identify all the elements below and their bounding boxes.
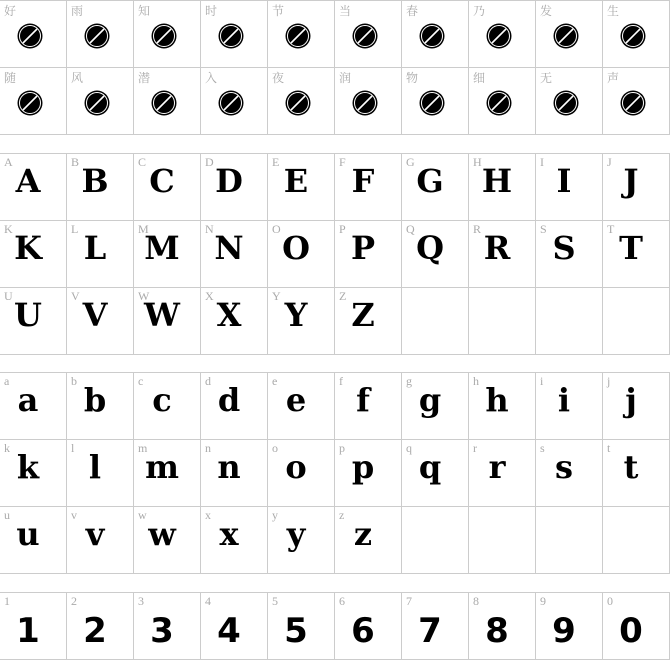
cell: 声: [603, 68, 670, 135]
n: [201, 440, 268, 507]
v: [67, 507, 134, 574]
cell: 发: [536, 1, 603, 68]
cell: 风: [67, 68, 134, 135]
v: v: [71, 508, 77, 522]
cell: 入: [201, 68, 268, 135]
c: c: [152, 381, 172, 419]
cell: 物: 物: [406, 71, 418, 85]
H: H: [473, 155, 482, 169]
z: [335, 507, 402, 574]
8: 8: [473, 594, 479, 608]
cell: 时: 时: [205, 4, 217, 18]
J: [603, 154, 670, 221]
empty: [402, 288, 469, 355]
b: [67, 373, 134, 440]
N: N: [214, 229, 244, 267]
s: s: [540, 441, 545, 455]
5: [268, 593, 335, 660]
cell: 节: [268, 1, 335, 68]
g: g: [419, 381, 441, 419]
empty: [469, 288, 536, 355]
cell: 潜: [134, 68, 201, 135]
x: [201, 507, 268, 574]
R: R: [484, 229, 510, 267]
F: F: [352, 162, 374, 200]
W: W: [138, 289, 149, 303]
M: [134, 221, 201, 288]
empty: [402, 507, 469, 574]
W: [134, 288, 201, 355]
k: k: [4, 441, 10, 455]
Q: Q: [406, 222, 415, 236]
Y: Y: [285, 296, 307, 334]
X: [201, 288, 268, 355]
n: n: [217, 448, 241, 486]
5: 5: [272, 594, 278, 608]
K: K: [14, 229, 42, 267]
cell: 润: 润: [339, 71, 351, 85]
w: w: [148, 515, 176, 553]
1: 1: [16, 611, 40, 651]
a: a: [4, 374, 9, 388]
0: [603, 593, 670, 660]
9: 9: [552, 611, 576, 651]
cell: 夜: [268, 68, 335, 135]
H: [469, 154, 536, 221]
a: [0, 373, 67, 440]
J: J: [623, 162, 639, 200]
section: lowercase: [0, 372, 670, 574]
z: z: [339, 508, 344, 522]
i: i: [558, 381, 570, 419]
Z: [335, 288, 402, 355]
B: [67, 154, 134, 221]
4: 4: [205, 594, 211, 608]
u: u: [16, 515, 40, 553]
g: [402, 373, 469, 440]
cell: 细: [469, 68, 536, 135]
o: [268, 440, 335, 507]
R: R: [473, 222, 481, 236]
cell: 声: 声: [607, 71, 619, 85]
c: [134, 373, 201, 440]
9: [536, 593, 603, 660]
g: g: [406, 374, 412, 388]
0: 0: [619, 611, 643, 651]
k: [0, 440, 67, 507]
cell: 春: 春: [406, 4, 418, 18]
2: 2: [71, 594, 77, 608]
X: X: [205, 289, 214, 303]
cell: 乃: [469, 1, 536, 68]
0: 0: [607, 594, 613, 608]
Q: Q: [416, 229, 444, 267]
d: d: [218, 381, 240, 419]
L: L: [71, 222, 78, 236]
x: x: [205, 508, 211, 522]
U: U: [4, 289, 13, 303]
U: U: [14, 296, 42, 334]
r: r: [473, 441, 477, 455]
c: c: [138, 374, 143, 388]
l: l: [71, 441, 74, 455]
h: h: [485, 381, 509, 419]
l: l: [89, 448, 101, 486]
e: [268, 373, 335, 440]
empty: [603, 507, 670, 574]
A: A: [4, 155, 13, 169]
y: [268, 507, 335, 574]
9: 9: [540, 594, 546, 608]
n: n: [205, 441, 211, 455]
cell: 春: [402, 1, 469, 68]
3: 3: [150, 611, 174, 651]
J: J: [607, 155, 612, 169]
section: chinese characters: [0, 0, 670, 135]
cell: 生: 生: [607, 4, 619, 18]
3: [134, 593, 201, 660]
q: [402, 440, 469, 507]
b: b: [84, 381, 106, 419]
a: a: [18, 381, 38, 419]
cell: 雨: [67, 1, 134, 68]
I: I: [557, 162, 571, 200]
cell: 乃: 乃: [473, 4, 485, 18]
u: u: [4, 508, 10, 522]
p: p: [339, 441, 345, 455]
P: P: [351, 229, 375, 267]
h: [469, 373, 536, 440]
M: M: [144, 229, 180, 267]
t: [603, 440, 670, 507]
p: [335, 440, 402, 507]
2: [67, 593, 134, 660]
cell: 发: 发: [540, 4, 552, 18]
A: A: [16, 162, 40, 200]
7: 7: [418, 611, 442, 651]
C: C: [138, 155, 146, 169]
S: [536, 221, 603, 288]
C: C: [149, 162, 175, 200]
4: [201, 593, 268, 660]
section: uppercase: [0, 153, 670, 355]
cell: 知: [134, 1, 201, 68]
G: G: [406, 155, 415, 169]
t: t: [607, 441, 610, 455]
cell: 夜: 夜: [272, 71, 284, 85]
Y: Y: [272, 289, 281, 303]
D: D: [205, 155, 214, 169]
cell: 好: 好: [4, 4, 16, 18]
G: G: [416, 162, 444, 200]
q: q: [406, 441, 412, 455]
8: 8: [485, 611, 509, 651]
5: 5: [284, 611, 308, 651]
E: E: [284, 162, 308, 200]
d: d: [205, 374, 211, 388]
cell: 细: 细: [473, 71, 485, 85]
8: [469, 593, 536, 660]
f: f: [356, 381, 370, 419]
s: [536, 440, 603, 507]
O: O: [272, 222, 281, 236]
2: 2: [83, 611, 107, 651]
empty: [469, 507, 536, 574]
P: P: [339, 222, 346, 236]
N: [201, 221, 268, 288]
H: H: [482, 162, 512, 200]
j: [603, 373, 670, 440]
empty: [536, 288, 603, 355]
cell: 润: [335, 68, 402, 135]
j: j: [607, 374, 610, 388]
cell: 潜: 潜: [138, 71, 150, 85]
empty: [536, 507, 603, 574]
cell: 节: 节: [272, 4, 284, 18]
O: O: [282, 229, 310, 267]
E: E: [272, 155, 279, 169]
O: [268, 221, 335, 288]
cell: 无: [536, 68, 603, 135]
cell: 风: 风: [71, 71, 83, 85]
z: z: [354, 515, 372, 553]
V: [67, 288, 134, 355]
l: [67, 440, 134, 507]
S: S: [540, 222, 547, 236]
C: [134, 154, 201, 221]
f: [335, 373, 402, 440]
B: B: [81, 162, 109, 200]
u: [0, 507, 67, 574]
6: 6: [351, 611, 375, 651]
f: f: [339, 374, 343, 388]
B: B: [71, 155, 79, 169]
y: y: [272, 508, 278, 522]
q: q: [419, 448, 441, 486]
i: i: [540, 374, 543, 388]
L: [67, 221, 134, 288]
Q: [402, 221, 469, 288]
U: [0, 288, 67, 355]
7: [402, 593, 469, 660]
T: T: [607, 222, 614, 236]
E: [268, 154, 335, 221]
T: [603, 221, 670, 288]
cell: 生: [603, 1, 670, 68]
k: k: [17, 448, 39, 486]
m: [134, 440, 201, 507]
s: s: [555, 448, 573, 486]
D: [201, 154, 268, 221]
K: [0, 221, 67, 288]
cell: 好: [0, 1, 67, 68]
x: x: [219, 515, 239, 553]
r: [469, 440, 536, 507]
I: [536, 154, 603, 221]
w: [134, 507, 201, 574]
A: [0, 154, 67, 221]
M: M: [138, 222, 149, 236]
i: [536, 373, 603, 440]
j: j: [625, 381, 637, 419]
R: [469, 221, 536, 288]
I: I: [540, 155, 544, 169]
o: o: [285, 448, 307, 486]
empty: [603, 288, 670, 355]
e: e: [272, 374, 277, 388]
6: [335, 593, 402, 660]
d: [201, 373, 268, 440]
F: [335, 154, 402, 221]
t: t: [624, 448, 638, 486]
cell: 无: 无: [540, 71, 552, 85]
cell: 随: [0, 68, 67, 135]
4: 4: [217, 611, 241, 651]
e: e: [286, 381, 306, 419]
L: L: [84, 229, 106, 267]
v: v: [86, 515, 104, 553]
p: p: [352, 448, 374, 486]
1: [0, 593, 67, 660]
3: 3: [138, 594, 144, 608]
V: V: [83, 296, 107, 334]
K: K: [4, 222, 13, 236]
Z: Z: [351, 296, 375, 334]
Y: [268, 288, 335, 355]
cell: 入: 入: [205, 71, 217, 85]
cell: 当: [335, 1, 402, 68]
r: r: [489, 448, 505, 486]
G: [402, 154, 469, 221]
cell: 随: 随: [4, 71, 16, 85]
D: D: [215, 162, 243, 200]
cell: 知: 知: [138, 4, 150, 18]
section: digits: [0, 592, 670, 660]
h: h: [473, 374, 479, 388]
cell: 雨: 雨: [71, 4, 83, 18]
F: F: [339, 155, 346, 169]
1: 1: [4, 594, 10, 608]
cell: 物: [402, 68, 469, 135]
6: 6: [339, 594, 345, 608]
W: W: [144, 296, 180, 334]
w: w: [138, 508, 147, 522]
X: X: [217, 296, 241, 334]
7: 7: [406, 594, 412, 608]
m: m: [138, 441, 147, 455]
T: T: [619, 229, 643, 267]
N: N: [205, 222, 214, 236]
cell: 当: 当: [339, 4, 351, 18]
P: [335, 221, 402, 288]
V: V: [71, 289, 80, 303]
S: S: [552, 229, 576, 267]
y: y: [287, 515, 305, 553]
b: b: [71, 374, 77, 388]
o: o: [272, 441, 278, 455]
cell: 时: [201, 1, 268, 68]
Z: Z: [339, 289, 346, 303]
m: m: [145, 448, 179, 486]
